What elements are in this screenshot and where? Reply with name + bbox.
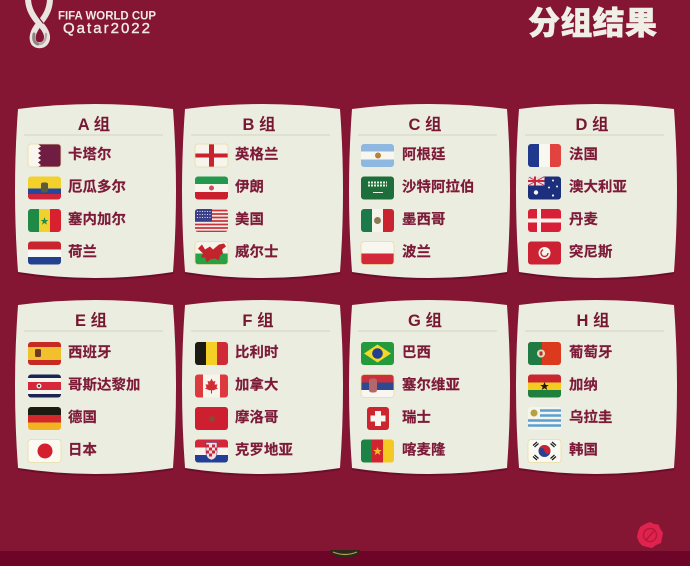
row: Portugal: 葡萄牙 <box>569 344 612 361</box>
row: Australia <box>528 176 627 200</box>
row: Cameroon <box>361 440 446 462</box>
heading: group H: H 组 <box>576 311 610 330</box>
row: Iran: 伊朗 <box>235 178 264 196</box>
row: Senegal <box>28 209 126 232</box>
logo text: Qatar2022 <box>63 20 150 37</box>
row: Saudi Arabia <box>361 176 474 200</box>
row: Germany <box>28 407 97 430</box>
row: Netherlands: 荷兰 <box>68 242 97 260</box>
row: USA: 美国 <box>235 210 264 228</box>
bottom emblem <box>330 550 360 558</box>
row: France: 法国 <box>569 145 598 163</box>
row: Ecuador <box>28 176 126 200</box>
row: Serbia <box>361 374 460 398</box>
row: Uruguay: 乌拉圭 <box>569 408 612 426</box>
row: Tunisia: 突尼斯 <box>569 242 612 260</box>
row: Portugal <box>528 342 612 365</box>
panel: group F <box>182 300 343 476</box>
row: Morocco <box>195 407 278 430</box>
row: Switzerland: 瑞士 <box>402 408 431 426</box>
row: Cameroon: 喀麦隆 <box>402 440 446 458</box>
row: Belgium: 比利时 <box>235 344 278 361</box>
row: Costa Rica <box>28 374 140 398</box>
panel: group C <box>349 104 510 280</box>
row: Denmark <box>528 209 598 232</box>
row: Morocco: 摩洛哥 <box>235 408 278 426</box>
logo text <box>58 10 156 37</box>
row: Canada: 加拿大 <box>235 376 278 394</box>
row: Denmark: 丹麦 <box>569 210 598 228</box>
heading: group A: A 组 <box>78 115 110 134</box>
row: Mexico: 墨西哥 <box>402 211 445 228</box>
panel: group A <box>15 104 176 280</box>
row: Wales <box>195 242 278 264</box>
row: Switzerland <box>367 407 431 430</box>
heading: group F: F 组 <box>242 311 274 330</box>
row: Canada <box>195 374 278 398</box>
row: Brazil: 巴西 <box>402 345 431 361</box>
row: Saudi Arabia: 沙特阿拉伯 <box>402 178 474 196</box>
row: Qatar: 卡塔尔 <box>68 146 111 163</box>
row: Belgium <box>195 342 278 365</box>
row: South Korea <box>528 440 598 462</box>
logo: Qatar 2022 emblem <box>28 0 50 45</box>
panel: group G <box>349 300 510 476</box>
row: Ghana <box>528 374 598 398</box>
bottom band <box>0 551 690 566</box>
row: Netherlands <box>28 242 97 264</box>
row: England <box>195 144 278 167</box>
row: Costa Rica: 哥斯达黎加 <box>68 376 140 394</box>
panel: group D <box>516 104 677 280</box>
row: Poland <box>361 242 431 264</box>
row: Uruguay <box>528 407 612 430</box>
row: Croatia <box>195 440 293 462</box>
title: 分组结果 <box>528 5 657 41</box>
heading: group E: E 组 <box>75 311 107 330</box>
row: Iran <box>195 176 264 200</box>
row: Spain <box>28 342 111 365</box>
row: Croatia: 克罗地亚 <box>235 442 293 458</box>
row: South Korea: 韩国 <box>569 440 598 458</box>
panel: group E <box>15 300 176 476</box>
heading: group B: B 组 <box>242 115 276 134</box>
heading: group G: G 组 <box>408 311 442 330</box>
heading: group C: C 组 <box>408 115 442 134</box>
row: Tunisia <box>528 242 612 264</box>
row: Argentina: 阿根廷 <box>402 145 446 163</box>
row: Qatar <box>28 144 111 167</box>
row: Argentina <box>361 144 446 167</box>
row: Spain: 西班牙 <box>68 344 111 361</box>
row: Japan <box>28 440 97 462</box>
heading: group D: D 组 <box>576 115 608 134</box>
row: France <box>528 144 598 167</box>
row: Serbia: 塞尔维亚 <box>402 376 460 394</box>
row: Poland: 波兰 <box>402 242 431 260</box>
row: Japan: 日本 <box>68 442 97 458</box>
panel: group B <box>182 104 343 280</box>
row: Wales: 威尔士 <box>235 242 278 260</box>
row: Germany: 德国 <box>68 408 97 426</box>
row: Senegal: 塞内加尔 <box>68 210 126 228</box>
row: England: 英格兰 <box>235 145 278 163</box>
row: Brazil <box>361 342 431 365</box>
row: Ghana: 加纳 <box>569 376 598 394</box>
panel: group H <box>516 300 677 476</box>
row: Mexico <box>361 209 445 232</box>
row: USA <box>195 209 264 232</box>
row: Ecuador: 厄瓜多尔 <box>68 178 126 196</box>
icon: watermark stamp <box>637 522 663 548</box>
logo text: FIFA WORLD CUP <box>58 10 156 22</box>
row: Australia: 澳大利亚 <box>569 178 627 196</box>
